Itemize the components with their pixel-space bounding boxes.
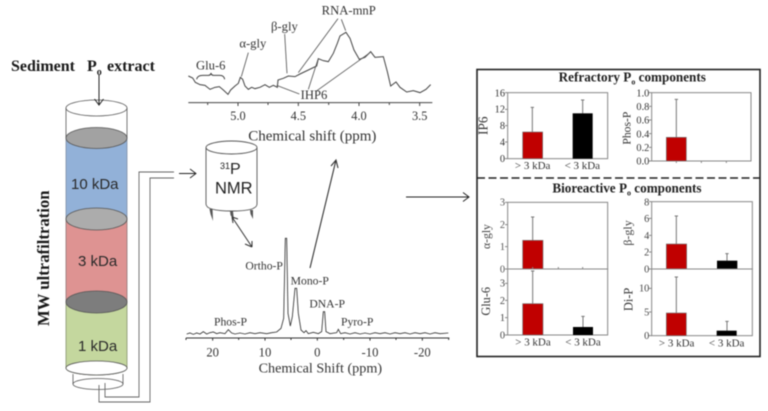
chart: Phos-P: 0.8 [636,102,649,113]
ultrafiltration column [66,100,127,390]
chart: Di-P: 0 [644,331,649,342]
axis line [188,103,432,106]
gray membrane 1 [66,128,127,148]
arrow: NMR to spectrum [232,217,252,247]
panel frame [477,70,760,356]
chart: alpha-gly: α-gly [480,224,493,249]
chart: beta-gly: 6 [644,214,649,225]
peak labels [196,3,376,102]
bioreactive section [479,181,752,350]
tick labels: 4.0 [351,109,367,123]
chart: Di-P: Di-P [621,288,635,311]
tick labels: 20 [206,346,219,360]
chart: IP6: IP6 [475,116,490,135]
heading: refractory: components [635,70,706,85]
chart: beta-gly: 8 [644,197,649,208]
tubing to NMR [99,172,174,402]
heading: bioreactive: Bioreactive P [552,181,627,196]
chart: alpha-gly: 0 [500,264,505,275]
axis line [186,338,449,341]
chart: IP6 [475,88,608,172]
spectrum trace [188,32,431,94]
arrow: extract into column [94,75,104,105]
main 31P spectrum [186,238,449,376]
chart: Glu-6: 0 [500,330,505,341]
column bottom [66,361,127,375]
arrow: Mono-P to expansion [310,160,338,268]
tick labels: -20 [414,346,431,360]
chart: Phos-P: Phos-P [620,111,633,145]
peak labels: β-gly [271,19,298,33]
chart: Glu-6: Glu-6 [479,287,493,316]
results panel [475,70,760,356]
chart: IP6: 8 [500,121,505,132]
peak labels: Glu-6 [196,59,226,73]
heading: sediment extract: Sediment [11,58,75,75]
green 1 kDa section [66,302,127,375]
chart: Glu-6: < 3 kDa [565,337,601,349]
tick labels: 4.5 [291,109,306,123]
chart: IP6: 0 [500,154,505,165]
label: 3 kDa: 3 kDa [78,253,118,270]
label: MW ultrafiltration: MW ultrafiltration [34,190,53,326]
cup rim [73,378,123,390]
NMR label: P [230,161,241,178]
chart: Phos-P: 0.4 [636,129,649,140]
heading: refractory: Refractory P [559,70,631,85]
gray membrane 2 [66,208,127,230]
tick labels: 0 [314,346,320,360]
peak labels: RNA-mnP [322,3,376,17]
NMR instrument icon [206,141,257,221]
chart: beta-gly: 2 [644,248,649,259]
chart: IP6: 16 [495,88,505,99]
dashed divider [477,177,760,179]
tick labels [230,109,427,123]
heading: bioreactive: o [627,188,631,197]
chart: IP6: 4 [500,137,505,148]
blue 10 kDa section [66,138,127,219]
peak labels: α-gly [239,36,267,50]
peak labels: Mono-P [291,274,329,287]
tick labels: 10 [259,346,271,360]
tick labels [206,346,431,360]
peak labels: DNA-P [309,298,345,311]
chart: Glu-6: > 3 kDa [515,337,551,349]
chart: beta-gly: β-gly [621,220,635,246]
gray membrane 3 [66,291,127,313]
chart: alpha-gly: 2 [500,220,505,231]
NMR top [206,141,257,154]
NMR label: 31 [220,161,230,171]
arrow: tubing to NMR [179,169,196,178]
NMR body [206,148,257,211]
chart: Phos-P: 0.0 [636,156,649,167]
chart: Phos-P [620,88,751,167]
label: 1 kDa: 1 kDa [78,338,118,355]
arrow: to results panel [406,192,469,202]
chart: Glu-6: 2 [500,296,505,307]
chart: Glu-6: 3 [500,279,505,290]
peak labels: Ortho-P [245,259,283,272]
refractory section [475,70,751,172]
chart: IP6: < 3 kDa [565,160,600,172]
column top opening [66,100,127,116]
NMR instrument icon: NMR [215,180,253,198]
peak labels: Pyro-P [341,316,374,329]
chart: Phos-P: 0.6 [636,116,649,127]
tick labels: -10 [362,346,378,360]
chart: IP6: 12 [495,105,505,116]
tick labels: 5.0 [230,109,246,123]
chart: beta-gly: 4 [644,231,649,242]
heading: sediment extract: P [87,58,97,75]
axis title: Chemical shift (ppm) [248,128,376,144]
chart: alpha-gly: 3 [500,198,505,209]
column upper wall [66,108,127,138]
red 3 kDa section [66,219,127,302]
chart: Phos-P: 0.2 [636,143,649,154]
Glu-6 bracket [197,73,225,79]
axis title: Chemical Shift (ppm) [259,360,382,376]
spectrum trace [187,238,448,334]
chart: Di-P: < 3 kDa [709,338,745,350]
chart: alpha-gly [480,198,608,275]
peak labels: Phos-P [214,315,248,328]
chart: Di-P [621,269,752,350]
chart: Glu-6 [479,269,608,349]
chart: Di-P: > 3 kDa [659,338,695,350]
chart: Di-P: 5 [644,307,649,318]
collection cup [73,374,123,384]
chart: beta-gly: 0 [644,264,649,275]
chart: alpha-gly: 1 [500,242,505,253]
heading: sediment extract: o [97,67,102,78]
top spectrum expansion [188,3,432,144]
heading: refractory: o [631,77,635,86]
tick labels: 3.5 [412,109,427,123]
annotation leader lines [241,19,370,94]
heading: bioreactive: components [631,181,702,196]
chart: Glu-6: 1 [500,313,505,324]
heading: sediment extract: extract [107,58,156,75]
peak labels [214,259,374,329]
chart: beta-gly [621,197,752,275]
chart: Phos-P: 1.0 [636,88,649,99]
label: 10 kDa: 10 kDa [71,176,119,193]
peak labels: IHP6 [301,88,327,102]
NMR legs [210,209,253,221]
chart: IP6: > 3 kDa [515,160,551,172]
chart: Di-P: 10 [639,284,649,295]
